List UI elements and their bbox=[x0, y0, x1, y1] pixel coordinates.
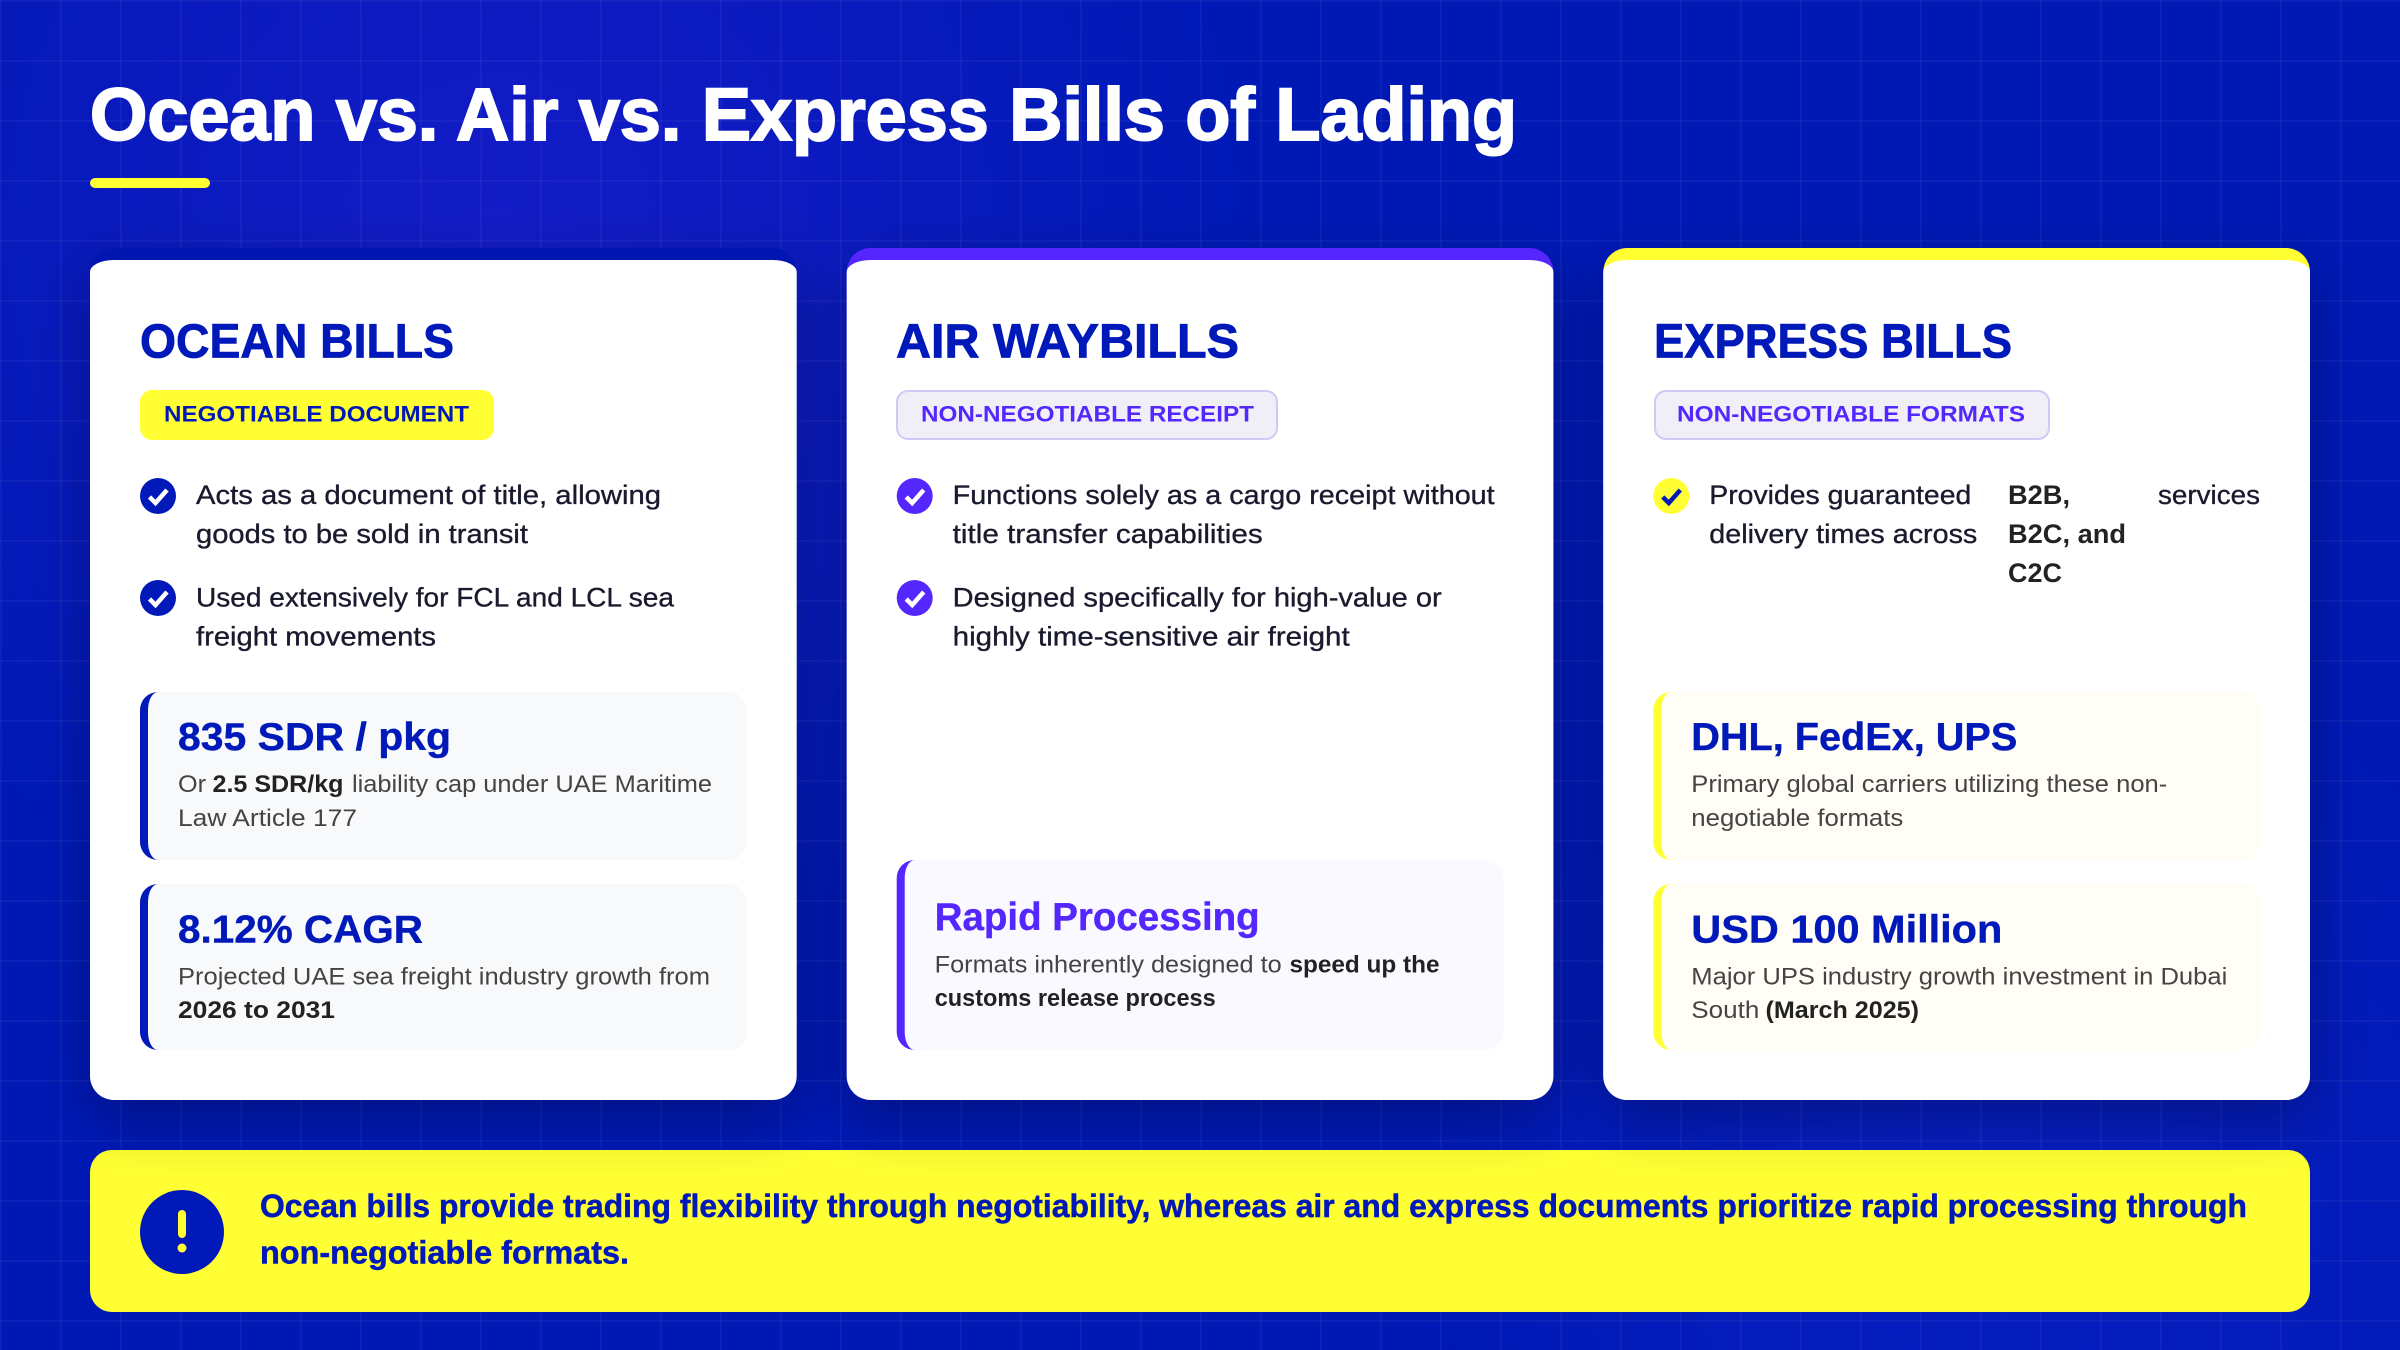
bullet 2 bbox=[140, 580, 675, 652]
bullet 1 bbox=[897, 478, 1495, 549]
bullet 2: Used extensively for FCL and LCL sea bbox=[196, 582, 675, 612]
heading: ocean bills: OCEAN BILLS bbox=[140, 316, 454, 368]
bullet: delivery times bbox=[1653, 478, 2260, 588]
stat box: UPS investment bbox=[1653, 884, 2260, 1050]
badge: non-negotiable receipt bbox=[897, 391, 1277, 439]
stat box: CAGR bbox=[140, 884, 747, 1050]
stat box: carriers: negotiable formats bbox=[1691, 805, 1903, 832]
stat box: rapid processing: speed up the bbox=[1290, 952, 1440, 978]
bullet 1: title transfer capabilities bbox=[953, 519, 1263, 549]
bullet: delivery times: services bbox=[2158, 480, 2260, 510]
panel: air waybills bbox=[847, 248, 1553, 1100]
bullet 2: highly time-sensitive air freight bbox=[953, 622, 1350, 652]
stat box: UPS investment: Major UPS industry growth investment in Dubai bbox=[1691, 964, 2227, 990]
stat box: UPS investment: South bbox=[1691, 997, 1759, 1024]
heading: express bills: EXPRESS BILLS bbox=[1654, 316, 2012, 368]
stat box: CAGR: Projected UAE sea freight industry growth from bbox=[178, 964, 710, 990]
bullet: delivery times: B2B, bbox=[2008, 480, 2070, 510]
bullet: delivery times: C2C bbox=[2008, 558, 2062, 588]
stat box: rapid processing bbox=[897, 860, 1503, 1050]
badge: non-negotiable formats: NON-NEGOTIABLE FORMATS bbox=[1677, 402, 2025, 426]
callout text bbox=[260, 1188, 2247, 1270]
icon: exclamation bbox=[140, 1190, 224, 1274]
callout text: Ocean bills provide trading flexibility through negotiability, whereas air and express documents prioritize rapid processing through bbox=[260, 1188, 2247, 1224]
stat box: UPS investment: (March 2025) bbox=[1766, 997, 1919, 1024]
bullet 1: Acts as a document of title, allowing bbox=[196, 480, 661, 510]
bullet 2 bbox=[897, 580, 1442, 652]
stat box: carriers: Primary global carriers utilizing these non- bbox=[1691, 771, 2167, 798]
panel: express bills bbox=[1603, 248, 2310, 1100]
bullet 1 bbox=[140, 478, 661, 549]
stat box: liability cap: 835 SDR / pkg bbox=[178, 716, 451, 759]
stat box: liability cap: liability cap under UAE Maritime bbox=[352, 771, 712, 798]
panel: ocean bills bbox=[90, 248, 797, 1100]
stat box: liability cap: Or bbox=[178, 771, 206, 798]
bullet: delivery times: B2C, and bbox=[2008, 519, 2126, 549]
stat box: carriers: DHL, FedEx, UPS bbox=[1691, 716, 2017, 759]
stat box: rapid processing: customs release process bbox=[935, 985, 1216, 1012]
stat box: CAGR: 8.12% CAGR bbox=[178, 908, 423, 952]
title: Ocean vs. Air vs. Express Bills of Lading bbox=[90, 73, 1517, 156]
callout: key takeaway bbox=[90, 1150, 2310, 1312]
badge: non-negotiable formats bbox=[1655, 391, 2049, 439]
bullet 2: freight movements bbox=[196, 622, 436, 652]
callout text: non-negotiable formats. bbox=[260, 1234, 629, 1270]
stat box: rapid processing: Formats inherently designed to bbox=[935, 952, 1282, 978]
heading: air waybills: AIR WAYBILLS bbox=[896, 316, 1239, 368]
bullet 1: Functions solely as a cargo receipt without bbox=[953, 480, 1495, 510]
stat box: liability cap: Law Article 177 bbox=[178, 805, 357, 832]
bullet: delivery times: delivery times across bbox=[1709, 519, 1977, 549]
stat box: liability cap bbox=[140, 692, 747, 860]
bullet 1: goods to be sold in transit bbox=[196, 519, 529, 549]
stat box: UPS investment: USD 100 Million bbox=[1691, 908, 2002, 952]
stat box: rapid processing: Rapid Processing bbox=[935, 896, 1260, 939]
stat box: carriers bbox=[1653, 692, 2260, 860]
stat box: liability cap: 2.5 SDR/kg bbox=[212, 771, 344, 798]
bullet 2: Designed specifically for high-value or bbox=[953, 582, 1442, 612]
bullet: delivery times: Provides guaranteed bbox=[1709, 480, 1971, 510]
title accent bar bbox=[90, 178, 210, 188]
badge: negotiable document: NEGOTIABLE DOCUMENT bbox=[164, 402, 470, 426]
badge: non-negotiable receipt: NON-NEGOTIABLE RECEIPT bbox=[921, 402, 1255, 426]
stat box: CAGR: 2026 to 2031 bbox=[178, 997, 335, 1024]
badge: negotiable document bbox=[140, 390, 494, 440]
